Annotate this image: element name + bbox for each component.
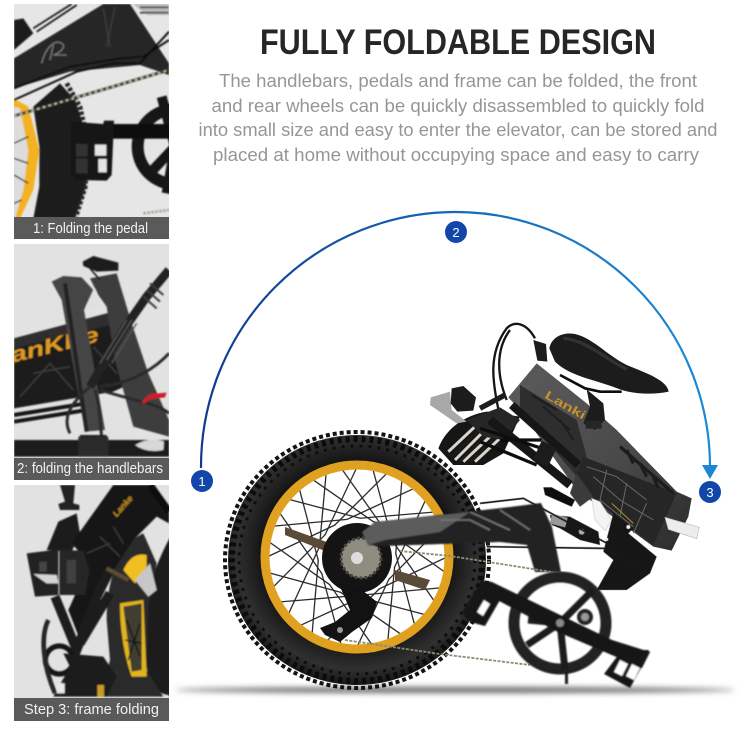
panel: step 2 folding the handlebars [8,244,169,480]
photo: folded frame close-up: Lanke [111,493,135,519]
step marker 3 [699,481,721,503]
bike: folded main frame, saddle, cables and front assembly [430,324,699,551]
bike: folding struts, clamp and down tube [480,405,657,590]
bike: swing arm [362,503,561,572]
step marker 3: 3 [706,485,714,500]
photo: pedal close-up [14,4,169,217]
arrowhead [702,465,718,479]
caption: step 1: 1: Folding the pedal [33,221,148,237]
step marker 1 [191,470,213,492]
bike: rear wheel tyre [225,432,489,688]
caption: step 2: 2: folding the handlebars [17,461,163,477]
photo: handlebar close-up [8,256,169,457]
panel: step 3 frame folding [14,485,173,721]
description text block: and rear wheels can be quickly disassembled to quickly fold [212,95,704,116]
caption: step 2 [14,458,169,480]
title: FULLY FOLDABLE DESIGN [260,23,656,62]
description text block: The handlebars, pedals and frame can be folded, the front [219,70,697,91]
photo: folded frame close-up [27,485,173,700]
step marker 2 [445,221,467,243]
bike: rear wheel rim and spokes [261,461,453,653]
step marker 1: 1 [198,474,206,489]
ground shadow [175,687,735,693]
blue folding arc with arrow [201,212,718,479]
photo: handlebar close-up: anKEe [8,322,101,368]
caption: step 3 [14,698,169,721]
bike: chainring, cranks and pedals [462,577,650,688]
description text block: into small size and easy to enter the elevator, can be stored and [198,119,718,140]
description text block [198,70,718,165]
bike: folded main frame, saddle, cables and front assembly: Lanki [542,388,588,422]
folded bike illustration [225,324,699,688]
bike: chain [345,551,552,665]
caption: step 1 [14,217,169,239]
step marker 2: 2 [452,225,460,240]
description text block: placed at home without occupying space and easy to carry [213,144,700,165]
panel: step 1 folding the pedal [14,4,169,239]
bike: rear hub, cassette and derailleur [285,523,430,642]
caption: step 3: Step 3: frame folding [24,701,159,718]
